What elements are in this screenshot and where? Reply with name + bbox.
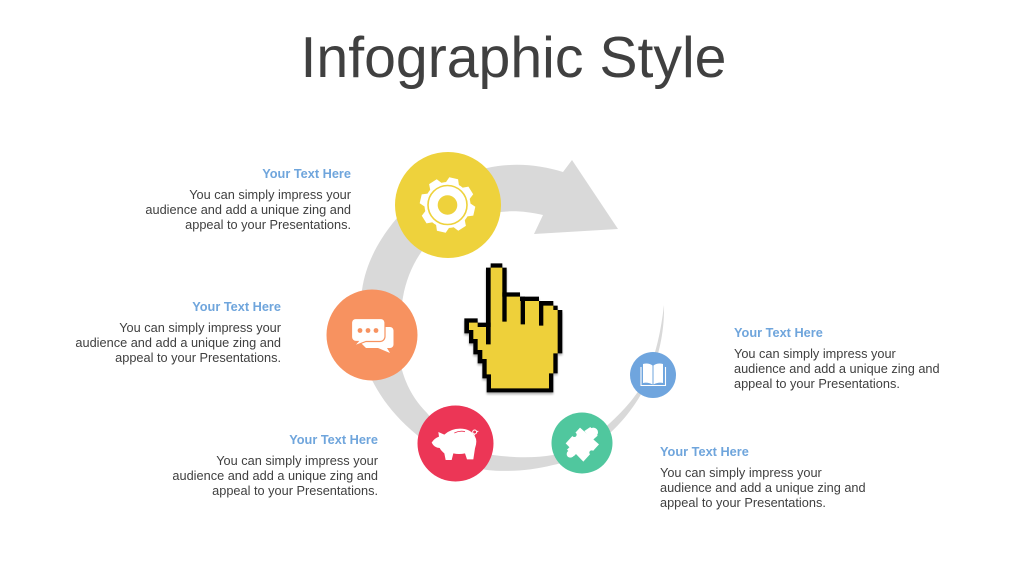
text block: right upper: You can simply impress your [734, 346, 896, 360]
text block: right upper: Your Text Here [734, 325, 823, 340]
text block: right upper: appeal to your Presentations. [734, 376, 900, 391]
text block: top left [145, 166, 351, 232]
text block: middle left: Your Text Here [192, 299, 281, 314]
title: Infographic Style [300, 26, 726, 90]
text block: right lower: You can simply impress your [660, 464, 822, 480]
text block: top left: appeal to your Presentations. [185, 217, 351, 232]
icon: gear circle [395, 152, 501, 258]
text block: right lower: appeal to your Presentations. [660, 495, 826, 510]
text block: right lower [660, 444, 866, 510]
text block: middle left: audience and add a unique zing and [75, 335, 281, 350]
text block: bottom left: Your Text Here [289, 432, 378, 447]
text block: bottom left: audience and add a unique zing and [172, 468, 378, 483]
icon: puzzle circle [552, 412, 612, 474]
text block: middle left: appeal to your Presentations. [115, 350, 281, 365]
text block: top left: You can simply impress your [189, 186, 351, 202]
text block: right lower: Your Text Here [660, 444, 749, 459]
arrow: circular grey arrow [360, 160, 664, 471]
text block: middle left: You can simply impress your [119, 320, 281, 334]
icon: pixel hand cursor [464, 263, 562, 394]
text block: top left: Your Text Here [262, 166, 351, 181]
text block: right upper [734, 325, 940, 391]
icon: book circle [630, 352, 676, 398]
text block: bottom left: appeal to your Presentations. [212, 483, 378, 498]
text block: middle left [75, 299, 281, 365]
text block: top left: audience and add a unique zing and [145, 202, 351, 217]
text block: right lower: audience and add a unique zing and [660, 480, 866, 495]
text block: bottom left [172, 432, 378, 498]
text block: bottom left: You can simply impress your [216, 452, 378, 468]
text block: right upper: audience and add a unique zing and [734, 361, 940, 376]
icon: chat circle [326, 290, 418, 380]
icon: piggy bank circle [418, 406, 494, 482]
